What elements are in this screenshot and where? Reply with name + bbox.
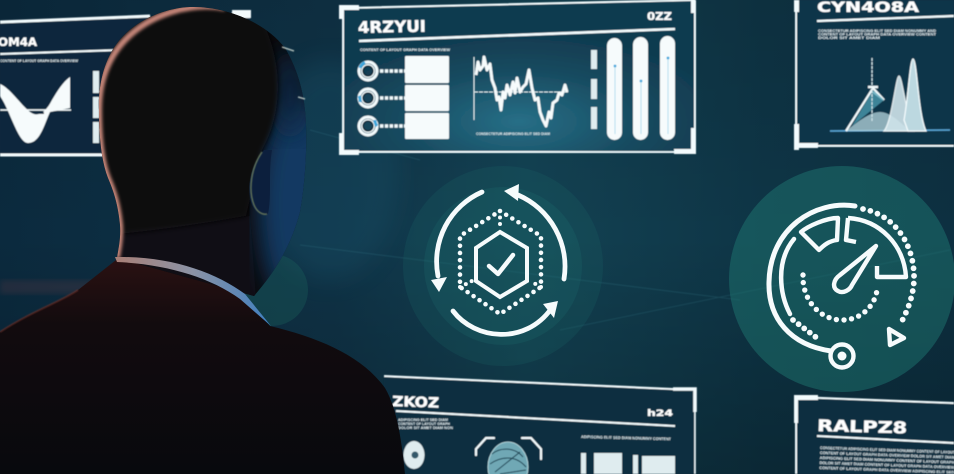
icon: shield check with cycle arrows <box>403 166 603 366</box>
heading: CYN4O8A: CYN4O8A <box>817 0 919 16</box>
shield hexagon <box>476 232 527 297</box>
caption text: DOLOR SIT AMET DIAM CONTENT OF LAYOUT GRAPH DATA OVERVIEW <box>819 461 954 470</box>
outer arc <box>769 205 855 351</box>
sliders <box>607 36 675 140</box>
list: status rings and blocks <box>359 56 449 139</box>
chart: wave <box>0 77 70 143</box>
icon: speedometer gauge <box>729 166 954 392</box>
panel: top left dashboard <box>0 10 251 155</box>
caption text: CONSECTETUR ADIPISCING ELIT SED DIAM NONUMMY AND <box>818 29 936 33</box>
gauge segments <box>801 218 838 250</box>
caption text: ADIPISCING ELIT SED DIAM NONUMMY CONTENT <box>581 435 672 441</box>
heading: ZKOZ: ZKOZ <box>392 394 439 412</box>
caption text: DOLOR SIT AMET DIAM <box>818 36 880 40</box>
column labels <box>591 50 597 129</box>
chart: distribution peaks <box>830 58 950 131</box>
figure: man seen from behind <box>0 0 405 474</box>
data tables <box>581 453 675 474</box>
outer dots <box>863 209 914 325</box>
label: 0ZZ: 0ZZ <box>647 10 672 23</box>
caption text <box>398 418 453 430</box>
heading: RALPZ8: RALPZ8 <box>817 416 907 437</box>
caption text: CONTENT OF LAYOUT GRAPH DATA OVERVIEW CONTENT <box>818 32 937 36</box>
blue face light <box>250 95 306 288</box>
knob <box>830 344 854 368</box>
arrowhead <box>889 329 904 345</box>
icon: fingerprint scanner <box>476 438 541 474</box>
caption text: CONTENT OF LAYOUT GRAPH DATA OVERVIEW DOLOR SIT AMET DIAM <box>820 451 954 460</box>
shirt collar <box>115 257 271 326</box>
neck shade <box>122 216 256 296</box>
panel: top centre dashboard <box>339 0 696 155</box>
head with hair, face shading and rim light <box>98 7 306 296</box>
ear <box>249 150 272 215</box>
caption text: DOLOR SIT AMET DIAM NON <box>398 426 453 430</box>
hair mass <box>90 0 278 234</box>
caption text: ADIPISCING ELIT SED DIAM NONUMMY CONTENT OF LAYOUT GRAPH <box>820 456 954 465</box>
chart: line graph <box>474 57 568 136</box>
heading: 4RZYUI: 4RZYUI <box>358 17 426 37</box>
caption text <box>819 446 954 474</box>
panel: top right dashboard <box>794 0 954 150</box>
column labels <box>93 71 99 143</box>
inner dots <box>803 275 877 320</box>
caption text: ADIPISCING ELIT SED DIAM <box>398 418 448 422</box>
rim light <box>99 6 225 258</box>
dotted hexagon <box>460 211 541 314</box>
jacket <box>0 260 405 474</box>
cycle arrows <box>437 192 565 334</box>
caption text: CONTENT OF LAYOUT GRAPH DATA OVERVIEW <box>360 48 450 52</box>
panel: bottom right dashboard <box>794 395 954 474</box>
needle <box>834 246 876 292</box>
panel: bottom centre dashboard <box>384 375 695 474</box>
caption text <box>818 29 937 40</box>
label: h24: h24 <box>647 409 673 419</box>
chart: line graph: CONSECTETUR ADIPISCING ELIT SED DIAM <box>476 132 550 136</box>
hair highlight <box>282 47 305 99</box>
check mark <box>489 255 513 274</box>
caption text: CONTENT OF LAYOUT GRAPH <box>398 422 450 426</box>
caption text: CONTENT OF LAYOUT GRAPH DATA OVERVIEW <box>0 59 78 63</box>
icon: disc <box>404 441 424 469</box>
